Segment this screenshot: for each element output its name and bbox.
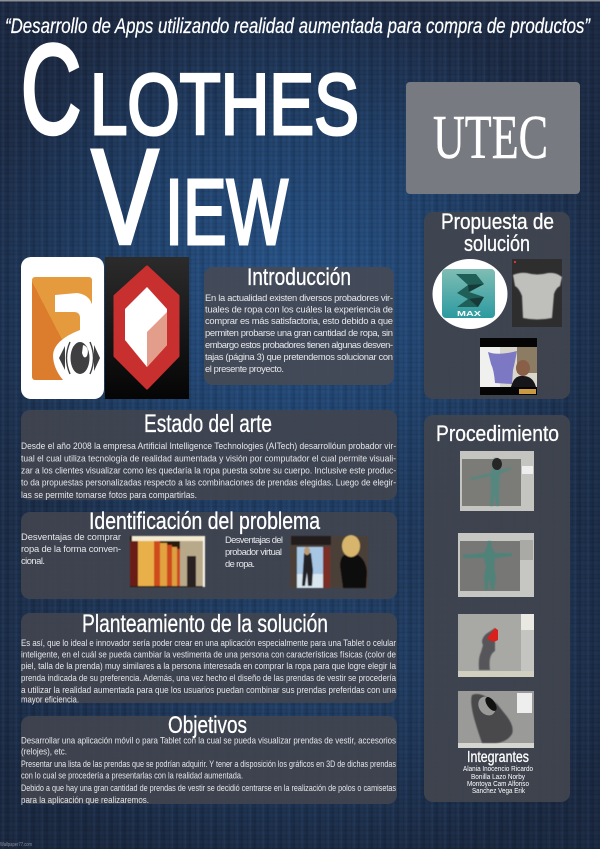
image: virtual fitting mirror [290, 535, 368, 588]
text: objectives body: para la aplicación que realizaremos. [21, 794, 149, 805]
panel: Planteamiento de la solución [21, 610, 397, 704]
image: 3D step 1 [460, 451, 534, 511]
team names: Alania Inocencio Ricardo [463, 764, 533, 773]
text: introduction body: tajas (página 3) que pretendemos solucionar con [205, 351, 393, 362]
text: introduction body: el presente proyecto. [205, 363, 284, 374]
text: solution body: a utilizar la realidad aumentada para que los usuarios puedan combinar sus prendas preferidas con una [21, 684, 397, 695]
text: objectives body: (relojes), etc. [21, 746, 67, 756]
heading: Propuesta de solución: solución [464, 231, 530, 256]
text: introduction body: embargo estos probadores tienen algunas desven- [205, 339, 393, 350]
text: solution body: piel, talla de la prenda) muy similares a la persona interesada en comprar la ropa para que logre elegir la [21, 660, 397, 671]
text: objectives body [21, 734, 396, 805]
team names [463, 764, 533, 795]
text: state of the art body [21, 440, 396, 500]
text: state of the art body: to da propuestas personalizadas respecto a las combinaciones de prendas elegidas. Luego de elegir- [21, 476, 396, 488]
watermark: Wallpaper77.com [0, 842, 32, 848]
image: webcam shirt try-on [480, 338, 537, 395]
panel: Introducción [204, 264, 394, 385]
team names: Sanchez Vega Erik [472, 786, 525, 795]
panel: UTEC [406, 82, 580, 194]
logo: orange app icon [21, 257, 104, 399]
text: objectives body: Desarrollar una aplicación móvil o para Tablet con la cual se pueda visualizar prendas de vestir, accesorios [21, 734, 396, 746]
heading: Introducción: Introducción [247, 264, 351, 291]
title: Clothes View [21, 19, 359, 272]
top rule [0, 0, 600, 2]
logo: red cube icon [105, 257, 189, 399]
panel: Identificación del problema [21, 508, 397, 599]
image: 3D step 4 [458, 691, 534, 748]
text: introduction body: permiten probarse una gran cantidad de ropa, sin [205, 327, 393, 338]
panel: Procedimiento [424, 415, 570, 802]
text: introduction body [205, 292, 393, 374]
icon: 3ds Max logo [432, 259, 508, 329]
text: solution body: inteligente, en el cuál se pueda cambiar la vestimenta de una persona con características físicas (color de [21, 648, 396, 660]
heading: Objetivos: Objetivos [168, 712, 247, 739]
text: virtual fitting disadvantages: de ropa. [225, 558, 255, 569]
text: objectives body: Debido a que hay una gran cantidad de prendas de vestir se decidió centrarse en la realización de polos o camisetas [21, 782, 396, 793]
image: 3D step 2 [458, 533, 534, 597]
text: conventional disadvantages: Desventajas de comprar [21, 531, 121, 542]
heading: Propuesta de solución: Propuesta de [441, 209, 554, 234]
text: virtual fitting disadvantages: Desventajas del [225, 534, 283, 545]
team names: Bonilla Lazo Norby [471, 772, 525, 781]
title: Clothes View: V [92, 123, 158, 272]
text: conventional disadvantages [21, 531, 121, 566]
image: fitting rooms [130, 536, 205, 587]
text: solution body: Es así, que lo ideal e innovador sería poder crear en una aplicación especialmente para una Tablet o celular [21, 637, 396, 648]
title: Clothes View: LOTHES [90, 57, 359, 153]
panel: Objetivos [21, 712, 397, 805]
text: state of the art body: tual el cual utiliza tecnología de realidad aumentada y visión por computador el cual permite visuali- [21, 452, 396, 464]
text: state of the art body: las se permite tomarse fotos para compartirlas. [21, 489, 197, 500]
text: virtual fitting disadvantages: probador virtual [225, 546, 282, 557]
heading: Procedimiento: Procedimiento [436, 421, 559, 446]
heading: Integrantes: Integrantes [467, 749, 529, 766]
panel: Propuesta de solución [424, 209, 570, 399]
title: Clothes View: C [21, 19, 81, 160]
heading: Propuesta de solución [441, 209, 554, 256]
text: conventional disadvantages: cional. [21, 555, 45, 566]
team names: Montoya Cam Alfonso [467, 779, 529, 788]
text: solution body [21, 637, 397, 704]
heading: Identificación del problema: Identificación del problema [89, 508, 321, 535]
text: state of the art body: zar a los clientes visualizar como les quedaría la ropa puesta sobre su cuerpo. Inclusive este produc- [21, 464, 396, 476]
text: virtual fitting disadvantages [225, 534, 283, 569]
title: Clothes View: IEW [165, 160, 288, 264]
heading: Planteamiento de la solución: Planteamiento de la solución [82, 610, 328, 638]
text: objectives body: Presentar una lista de las prendas que se podrían adquirir. Y tener a disposición los gráficos en 3D de dichas prendas [21, 758, 396, 769]
image: torso model [512, 259, 562, 327]
heading: Estado del arte: Estado del arte [144, 410, 272, 438]
text: introduction body: tuales de ropa con los cuáles la experiencia de [205, 304, 393, 314]
text: state of the art body: Desde el año 2008 la empresa Artificial Intelligence Technologies (AITech) desarrollóun probador vir- [21, 440, 396, 451]
text: solution body: mayor eficiencia. [21, 694, 79, 704]
text: introduction body: comprar es más satisfactoria, esto debido a que [205, 315, 393, 326]
panel: Estado del arte [21, 410, 397, 500]
icon: 3ds Max logo: MAX [457, 309, 481, 318]
text: introduction body: En la actualidad existen diversos probadores vir- [205, 292, 393, 303]
panel: UTEC: UTEC [433, 104, 548, 172]
text: solution body: prenda indicada de su preferencia. Además, una vez hecho el diseño de las prendas de vestir se procedería [21, 672, 397, 683]
text: objectives body: con lo cual se procedería a presentarlas con la realidad aumentada. [21, 770, 243, 780]
image: 3D step 3 [458, 614, 534, 677]
text: conventional disadvantages: ropa de la forma conven- [21, 543, 121, 554]
